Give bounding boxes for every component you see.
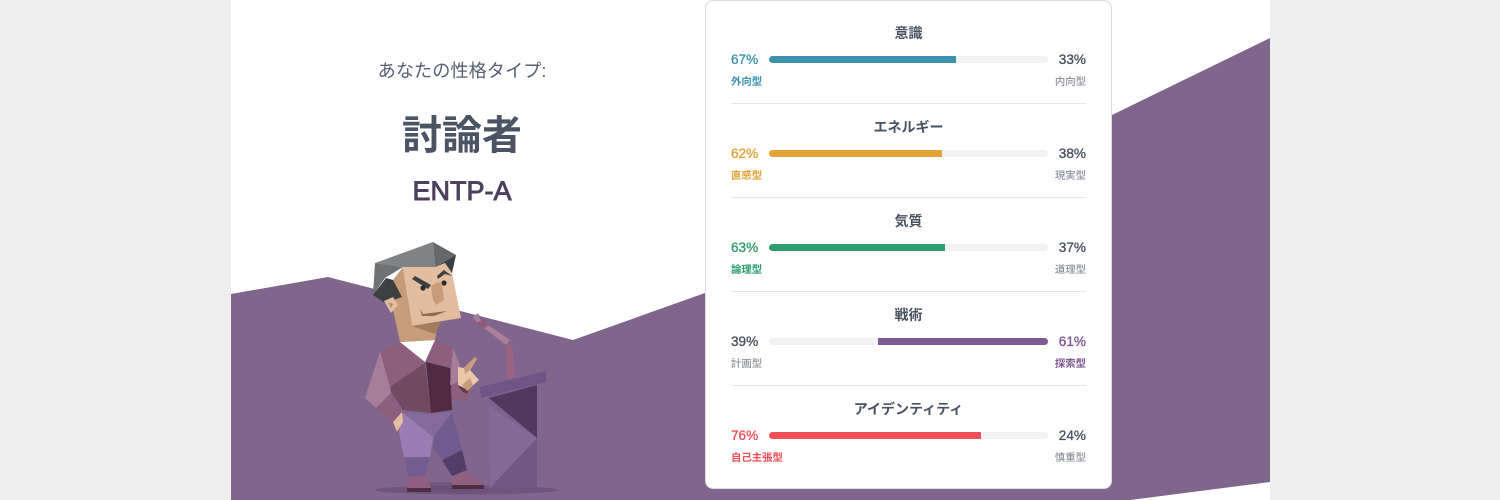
scale: energy — [731, 119, 1086, 182]
scale: energy: 直感型 — [731, 171, 762, 182]
scale: nature — [731, 213, 1086, 276]
scale: identity: 24% — [1059, 428, 1086, 443]
scale: energy: 現実型 — [1055, 171, 1086, 182]
scale: identity: 慎重型 — [1055, 453, 1086, 464]
scale: mind — [731, 25, 1086, 88]
scale: tactics: 計画型 — [731, 359, 762, 370]
scale: mind: 33% — [1059, 52, 1086, 67]
scale: mind: 67% — [731, 52, 758, 67]
scale: mind: 内向型 — [1055, 77, 1086, 88]
scale: tactics — [731, 307, 1086, 370]
type name: 討論者 — [402, 114, 522, 158]
label: your personality type: あなたの性格タイプ: — [378, 61, 546, 81]
scale: tactics: 戦術 — [894, 307, 922, 323]
head — [373, 242, 461, 342]
scale: energy: 38% — [1059, 146, 1086, 161]
scale: nature: 道理型 — [1055, 265, 1086, 276]
scale: nature: 気質 — [894, 213, 922, 229]
scale: nature: 論理型 — [731, 265, 762, 276]
scale: identity: アイデンティティ — [854, 401, 963, 417]
panel: trait scores — [705, 0, 1112, 489]
scale: tactics: 39% — [731, 334, 758, 349]
white content panel — [231, 0, 1270, 500]
scale: mind: 外向型 — [731, 77, 762, 88]
scale: energy: エネルギー — [874, 119, 944, 135]
microphone — [473, 313, 515, 379]
scale: tactics: 61% — [1059, 334, 1086, 349]
torso and arms — [365, 340, 479, 432]
scale: energy: 62% — [731, 146, 758, 161]
scale: tactics: 探索型 — [1055, 359, 1086, 370]
podium — [480, 371, 546, 488]
scale: identity — [731, 401, 1086, 464]
scale: nature: 63% — [731, 240, 758, 255]
scale: identity: 76% — [731, 428, 758, 443]
scale: identity: 自己主張型 — [731, 453, 783, 464]
legs — [399, 412, 484, 492]
scale: nature: 37% — [1059, 240, 1086, 255]
scale: mind: 意識 — [894, 25, 922, 41]
type code: ENTP-A — [412, 176, 512, 206]
